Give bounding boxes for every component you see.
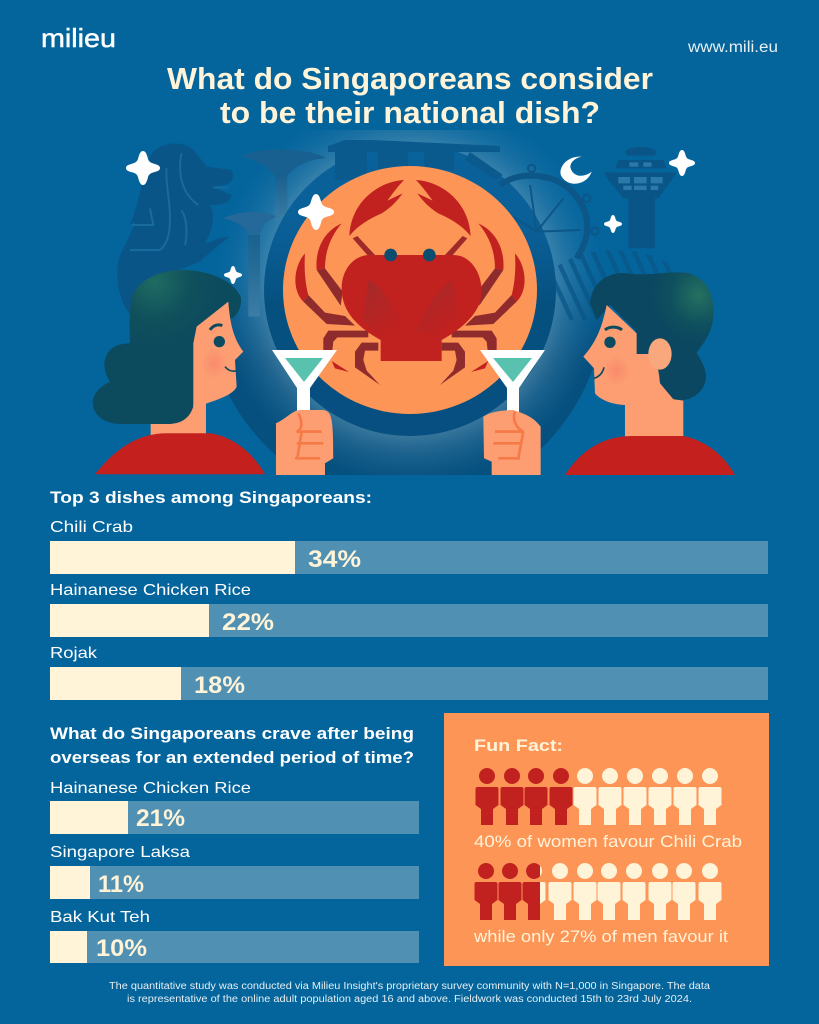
bar: Singapore Laksa 11%: 11% [98, 871, 144, 898]
pictogram: women 40% [476, 768, 722, 825]
man blush [609, 361, 624, 380]
skyline: Marina Bay Sands [328, 140, 503, 180]
bar: Bak Kut Teh 10%: Bak Kut Teh [50, 909, 150, 926]
woman eye and brow [210, 325, 237, 371]
crab shell shading [364, 280, 394, 328]
caption: men: while only 27% of men favour it [473, 928, 728, 946]
bar: Singapore Laksa 11% [50, 844, 419, 899]
sparkle stars [126, 150, 695, 284]
man eye and brow [594, 327, 622, 378]
bar: Hainanese Chicken Rice 22%: Hainanese Chicken Rice [50, 582, 251, 599]
bar: Bak Kut Teh 10% [50, 909, 419, 963]
bar: Rojak 18%: Rojak [50, 645, 98, 662]
woman shirt [95, 433, 265, 474]
crab [295, 180, 525, 385]
bar: Hainanese Chicken Rice 22% [50, 582, 768, 637]
right glass [480, 350, 545, 412]
skyline: supertrees [223, 149, 327, 317]
bar chart: cravings overseas [50, 780, 419, 963]
fun fact heading: Fun Fact: [474, 736, 563, 755]
bar: Hainanese Chicken Rice 21%: Hainanese Chicken Rice [50, 780, 251, 797]
skyline: Merlion [117, 143, 233, 315]
crab eyes [384, 249, 436, 261]
bar: Hainanese Chicken Rice 21% [50, 780, 419, 834]
heading: cravings overseas [50, 725, 414, 767]
woman hair [93, 270, 241, 424]
panel: fun fact [444, 713, 769, 966]
crab right limbs [416, 180, 525, 385]
heading: top 3 dishes: Top 3 dishes among Singaporeans: [50, 489, 372, 507]
woman [93, 270, 265, 474]
logo: milieu: milieu [41, 23, 116, 53]
website url: www.mili.eu [687, 39, 778, 56]
illustration: crab with two people toasting [92, 130, 735, 475]
skyline: dark vignette lower centre [228, 300, 605, 475]
bar chart: top 3 dishes [50, 519, 768, 700]
bar: Hainanese Chicken Rice 21%: 21% [136, 805, 185, 832]
orange circle [283, 166, 537, 414]
pictogram: men 27% [474, 863, 722, 920]
man ear [648, 338, 672, 370]
heading: cravings overseas: What do Singaporeans crave after being [50, 725, 414, 743]
woman neck [150, 403, 206, 435]
bar: Chili Crab 34%: Chili Crab [50, 519, 133, 536]
dark disc behind crab [264, 144, 556, 436]
bar: Chili Crab 34% [50, 519, 768, 574]
crescent moon [560, 157, 592, 184]
crab left limbs [295, 180, 404, 385]
left glass [272, 350, 337, 412]
title: to be their national dish? [220, 95, 600, 130]
bar: Bak Kut Teh 10%: 10% [96, 935, 147, 962]
bar: Singapore Laksa 11%: Singapore Laksa [50, 844, 190, 861]
man [565, 272, 735, 475]
woman face [193, 302, 243, 407]
skyline: striped dome [556, 250, 680, 320]
man hair [590, 272, 714, 400]
title: What do Singaporeans consider [167, 61, 653, 96]
woman blush [207, 354, 221, 372]
halo light ring [230, 130, 590, 470]
bar: Chili Crab 34%: 34% [308, 546, 361, 573]
footnote: is representative of the online adult population aged 16 and above. Fieldwork was conducted 15th to 23rd July 2024. [127, 994, 692, 1005]
heading: cravings overseas: overseas for an extended period of time? [50, 749, 414, 767]
skyline: changi control tower [603, 147, 677, 248]
man shirt [565, 436, 735, 475]
caption: women: 40% of women favour Chili Crab [474, 833, 742, 851]
bar: Hainanese Chicken Rice 22%: 22% [222, 609, 274, 636]
bar: Rojak 18% [50, 645, 768, 700]
footnote [109, 981, 710, 1005]
crab body [342, 255, 482, 361]
footnote: The quantitative study was conducted via Milieu Insight's proprietary survey community with N=1,000 in Singapore. The data [109, 981, 710, 992]
title [167, 61, 653, 130]
bar: Rojak 18%: 18% [194, 672, 245, 699]
skyline: ferris wheel [500, 165, 599, 258]
right hand [483, 410, 541, 475]
left hand [276, 410, 333, 475]
man face and neck [583, 305, 683, 438]
